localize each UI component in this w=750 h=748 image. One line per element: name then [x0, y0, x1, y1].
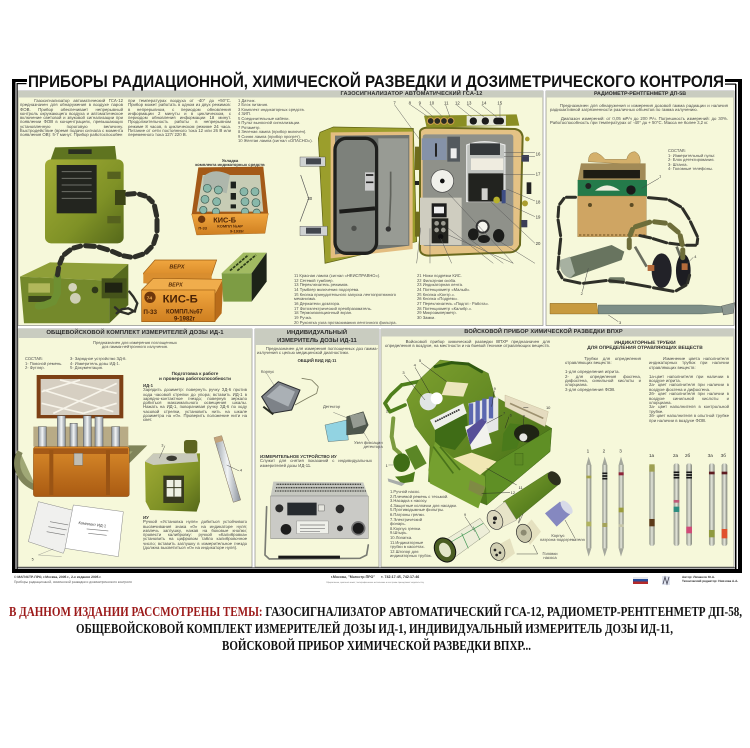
icon: ID-1 documentation booklets: 5	[32, 558, 34, 562]
text: GSA-12 parts list 21-30: 27 Переключатель «Подгот.- Работа».	[417, 301, 489, 306]
caption: pump heads: насоса	[543, 555, 557, 560]
text: GSA-12 parts list 1-10: 9 Синяя лампа (прибор прогрет).	[238, 134, 301, 139]
text: GSA-12 parts list 21-30: 30 Замки.	[417, 315, 435, 320]
text: tube colour changes: 3а- цвет наполнителя в контрольной трубке.	[649, 404, 729, 414]
icon: VPKhR kit: 1	[386, 463, 389, 468]
icon: VPKhR flashlight and pump heads	[430, 469, 575, 566]
footer: publisher contact	[326, 575, 424, 584]
heading: indicator tubes: ИНДИКАТОРНЫЕ ТРУБКИ	[614, 341, 676, 346]
icon: ID-11 pouch	[262, 373, 318, 414]
icon: GSA-12 open case: 14	[482, 100, 487, 105]
text: tube colour changes: 2б- цвет наполнителя при наличии в воздухе синильной кислоты и хлорциана.	[649, 391, 729, 405]
text: VPKhR parts list: 8.Корпус грелки.	[390, 526, 421, 531]
text: GSA-12 parts list 11-20: 13 Переключатель режимов.	[294, 282, 349, 287]
icon: VPKhR kit: 10	[546, 405, 551, 410]
heading: ID-11: ИНДИВИДУАЛЬНЫЙ	[287, 330, 347, 336]
text: GSA-12 parts list 11-20: 20 Рукоятка узла протаскивания ленточного фильтра.	[294, 320, 397, 325]
indicator tubes group 1a 2a 2b 3a 3b: 3а	[708, 453, 713, 458]
caption: detector: Детектор	[323, 404, 340, 409]
caption: indicator kit layout	[195, 158, 265, 167]
indicator tubes group 1a 2a 2b 3a 3b: 2а	[673, 453, 679, 458]
text: ID-1 composition	[25, 356, 62, 370]
text: GSA-12 parts list 11-20: 16 Держатели дозатора.	[294, 301, 340, 306]
text: DP-5B composition: СОСТАВ:	[668, 148, 686, 153]
text: VPKhR parts list: 1.Ручной насос.	[390, 489, 420, 494]
text: GSA-12 parts list 1-10: 1 Датчик.	[238, 98, 256, 103]
text: DP-5B composition: 4- Головные телефоны.	[668, 166, 713, 171]
text: DP-5B composition: 2- Блок детектирования.	[668, 157, 715, 162]
text: tube colour changes: Изменение цвета наполнителя индикаторных трубок при наличии отравляющих веществ:	[649, 356, 729, 370]
icon: GSA-12 open case: 16	[536, 152, 541, 157]
icon: open KIS-B indicator kit	[192, 167, 268, 235]
icon: VPKhR kit: 9	[494, 386, 497, 391]
text: VPKhR parts list: 11.Индикаторные	[390, 540, 423, 545]
text: tube purposes: Трубки для определения отравляющих веществ:	[565, 356, 641, 365]
icon: KIS-B crates	[142, 260, 223, 323]
icon: VPKhR kit: 8	[523, 414, 526, 419]
text: VPKhR parts list: 2.Плечевой ремень с тесьмой.	[390, 494, 448, 499]
icon: publisher logo	[662, 576, 670, 585]
icon: KIS-B crates: КОМПЛ.№67	[166, 308, 203, 315]
caption: indicator kit layout: Укладка	[222, 158, 238, 163]
text: measuring device: Служит для снятия показаний с индивидуальных измерителей дозы ИД-11.	[260, 458, 372, 468]
icon: ID-1 charger and dosimeter tube	[145, 436, 242, 512]
icon: GSA-12 open case: 7	[393, 100, 396, 105]
icon: open KIS-B indicator kit: КИС-Б	[213, 216, 236, 225]
caption: cartridge housing	[540, 533, 585, 542]
text: GSA-12 parts list 21-30: 29 Микроамперметр.	[417, 310, 457, 315]
heading: VPKhR: ВОЙСКОВОЙ ПРИБОР ХИМИЧЕСКОЙ РАЗВЕДКИ ВПХР	[464, 329, 623, 335]
indicator tubes group 1a 2a 2b 3a 3b: 3б	[721, 453, 726, 458]
panel: dosimeter kit ID-1	[18, 329, 252, 567]
text: GSA-12 parts list 21-30: 24 Потенциометр «Малый».	[417, 287, 470, 292]
text: tube purposes: 2- для определения фосгена, дифосгена, синильной кислоты и хлорциана.	[565, 374, 641, 387]
text: GSA-12 parts list 1-10: 3 Комплект индикаторных средств.	[238, 107, 305, 112]
icon: ID-1 charger and dosimeter tube: 3	[161, 444, 163, 448]
footer: publisher contact: Оформление, оригинал-макет, полиграфическое исполнение и все права принадлежат издательству	[326, 582, 424, 584]
footer: publisher info: © МАГИСТР-ПРО, г.Москва, 2005 г., 2-е издание 2005 г.	[14, 575, 101, 579]
text: GSA-12 parts list 21-30: 26 Кнопка «Подрезк».	[417, 296, 458, 301]
footer: publisher info: Приборы радиационной, химической разведки и дозиметрического контроля	[14, 580, 132, 584]
text: VPKhR purpose: Войсковой прибор химической разведки ВПХР предназначен для определения в воздухе, на местности и на боевой технике отравляющих веществ.	[385, 339, 550, 348]
icon: open KIS-B indicator kit: КОМПЛ №АР	[217, 223, 243, 228]
footer: authors: Технический редактор: Ниязова А.А.	[682, 579, 738, 583]
text: IU preparation: ИУ	[143, 515, 149, 520]
icon: ZIP green box	[222, 253, 267, 302]
text: ID-1 composition continued	[70, 356, 127, 370]
text: VPKhR parts list: трубки в кассетах.	[390, 544, 425, 549]
text: GSA-12 parts list 11-20: 11 Красная лампа (сигнал «НЕИСПРАВНО»).	[294, 273, 380, 278]
text: VPKhR parts list: 3.Насадка к насосу.	[390, 498, 427, 503]
text: ID-1 preparation: ИД-1	[143, 383, 153, 388]
heading: indicator tubes	[587, 340, 703, 351]
text: DP-5B description	[550, 103, 728, 125]
text: VPKhR parts list: 7.Электрический	[390, 517, 422, 522]
text: ID-1 composition continued: 5- Документация.	[70, 365, 103, 370]
footer: publisher contact: г.Москва, "Магистр-ПРО" т. 742-17-45, 742-17-46	[331, 575, 419, 579]
text: GSA-12 parts list 21-30: 21 Ножи подрезки КИС.	[417, 273, 462, 278]
text: GSA-12 parts list 11-20: 19 Ручка.	[294, 315, 312, 320]
text: DP-5B composition: 1- Измерительный пульт.	[668, 152, 715, 158]
text: DP-5B composition	[668, 148, 715, 171]
text: GSA-12 parts list 1-10	[238, 98, 313, 143]
icon: GSA-12 open case: 17	[536, 172, 541, 177]
footer: publisher info	[14, 575, 132, 584]
icon: DP-5B radiometer with probe and headphones: 2	[581, 291, 584, 296]
indicator tubes group 1 2 3: 3	[619, 448, 622, 453]
icon: ID-11 detector	[325, 412, 369, 442]
icon: KIS-B crates: КИС-Б	[163, 294, 198, 306]
text: ID-1 preparation: Зарядить дозиметр: повернуть ручку ЗД-6 против хода часовой стрелки до упора; вставить ИД-1 в зарядно-контактное гнездо; повернув зеркало добиться максимального освещения шкалы. Нажать на ИД-1, поворачивая ручку ЗД-6 по ходу часовой стрелки, установить нить на шкале дозиметра на «0». Проверить положение нити на свет.	[143, 387, 247, 422]
text: ID-1 composition: 1- Поясной ремень.	[25, 360, 62, 366]
icon: GSA-12 open case: 15	[497, 100, 503, 105]
icon: GSA-12 open case: 11	[444, 100, 449, 105]
icon: DP-5B radiometer with probe and headphones	[550, 152, 735, 325]
text: GSA-12 parts list 11-20: 18 Термоизоляционный экран.	[294, 310, 352, 315]
text: GSA-12 parts list 11-20: 15 Кнопка принудительного запуска лентопротяжного	[294, 292, 396, 297]
text: VPKhR parts list: 9.Штырь.	[390, 530, 408, 535]
indicator tubes group 1a 2a 2b 3a 3b: 2б	[685, 453, 691, 458]
icon: VPKhR kit: 6	[510, 413, 513, 418]
icon: VPKhR kit: 4	[414, 363, 417, 368]
icon: KIS-B crates: П-33	[143, 309, 157, 316]
caption: cartridge housing: Корпус	[551, 533, 565, 538]
indicator tubes group 1 2 3: 1	[587, 448, 590, 453]
icon: GSA-12 open case: 8	[409, 100, 412, 105]
heading: preparation	[159, 371, 231, 381]
footer: authors: Автор: Лиманов Ю.А.	[682, 575, 715, 579]
text: GSA-12 description column 1: Газосигнализатор автоматический ГСА-12 предназначен для обнаружения в воздухе паров ФОВ. Прибор обеспечивает непрерывный контроль окружающего воздуха и автоматическое включение световой и звуковой сигнализации при появлении ФОВ в концентрациях, превышающих установленную пороговую величину. Быстродействие (время подачи сигнала с момента появления ОВ): 5-7 минут. Прибор работоспособен	[20, 98, 123, 137]
text: GSA-12 parts list 1-10: 5 Соединительные кабели.	[238, 116, 290, 121]
icon: KIS-B crates: 9-1982г	[174, 317, 196, 323]
caption: ID-11 overview: ОБЩИЙ ВИД ИД-11	[298, 358, 336, 363]
text: IU preparation: Ручкой «Установка нуля» добиться устойчивого высвечивания знака «0» на индикаторе нуля; извлечь заглушку, нажав на боковые кнопки; провести калибровку: ручкой «Калибровка» установить на цифровом табло калибровочное число; вставить заглушку в измерительное гнездо (должна высветиться «0» на индикаторе нуля).	[143, 519, 247, 550]
caption: cartridge housing: патрона-подогревателя	[540, 537, 585, 542]
icon: russian flag	[633, 577, 648, 584]
icon: ID-1 case with dosimeters	[17, 375, 140, 497]
icon: open KIS-B indicator kit: 9-1939г	[230, 229, 244, 234]
caption: indicator kit layout: комплекта индикаторных средств	[195, 162, 265, 167]
text: VPKhR parts list: 6.Патроны грелки.	[390, 512, 425, 517]
caption: detector fixing unit: детектора	[363, 444, 383, 449]
text: ID-11 purpose: Предназначен для измерения поглощенных доз гамма-излучения с целью медицинской диагностики.	[257, 346, 378, 355]
icon: VPKhR kit: 7	[503, 410, 506, 415]
heading: DP-5B: РАДИОМЕТР-РЕНТГЕНМЕТР ДП-5В	[594, 91, 686, 97]
icon: VPKhR kit: 12	[511, 490, 516, 495]
text: GSA-12 parts list 1-10: 7 Ротаметр.	[238, 125, 261, 130]
icon: KIS-B crates: 74	[147, 295, 152, 301]
text: VPKhR parts list: 4.Защитные колпачки для насадки.	[390, 503, 457, 508]
icon: VPKhR kit: 3	[402, 370, 405, 375]
bottom note text: ВОЙСКОВОЙ ПРИБОР ХИМИЧЕСКОЙ РАЗВЕДКИ ВПХР...	[222, 637, 531, 654]
text: GSA-12 parts list 1-10: 2 Блок питания.	[238, 102, 268, 107]
bottom note text	[9, 603, 742, 654]
text: GSA-12 parts list 11-20: механизма.	[294, 296, 316, 301]
text: DP-5B description: Диапазон измерений: от 0,05 мР/ч до 200 Р/ч. Погрешность измерений: до 30%. Работоспособность при температурах от -40° до + 50°С. Масса не более 3,2 кг.	[550, 116, 728, 125]
icon: DP-5B radiometer with probe and headphones: 4	[694, 254, 697, 259]
text: VPKhR parts list	[390, 489, 457, 558]
icon: VPKhR flashlight and pump heads: 9	[464, 513, 466, 517]
icon: open KIS-B indicator kit: П-33	[198, 225, 208, 230]
icon: GSA-12 open case: 19	[536, 214, 541, 219]
indicator tubes group 1 2 3	[586, 448, 624, 557]
panel: gas detector GSA-12	[18, 91, 543, 326]
text: GSA-12 parts list 21-30: 22 Фильтрная скоба.	[417, 278, 456, 283]
icon: DP-5B radiometer with probe and headphones: 1	[659, 174, 662, 179]
icon: GSA-12 sensor unit	[45, 146, 126, 243]
text: ID-1 purpose: доз гамма-нейтронного излучения.	[102, 344, 168, 349]
text: GSA-12 parts list 1-10: 10 Желтая лампа (сигнал «ОПАСНО»).	[238, 138, 313, 143]
text: ID-1 composition: 2- Футляр.	[25, 365, 45, 370]
icon: VPKhR kit	[385, 358, 552, 523]
text: measuring device: ИЗМЕРИТЕЛЬНОЕ УСТРОЙСТВО ИУ	[260, 454, 337, 459]
text: GSA-12 parts list 21-30: 23 Индикаторная лента.	[417, 282, 463, 287]
text: DP-5B description: Предназначен для обнаружения и измерения дозовой гамма радиации и наличия радиоактивной загрязненности различных объектов по гамма излучению.	[550, 103, 728, 112]
text: DP-5B composition: 3- Штанга.	[668, 162, 688, 166]
icon: GSA-12 open case: 18	[536, 199, 541, 204]
text: ID-1 purpose: Предназначен для измерения поглощенных	[93, 340, 177, 345]
icon: GSA-12 open case: 12	[455, 100, 460, 105]
icon: VPKhR kit: 5	[419, 358, 422, 363]
caption: pouch: Корпус	[261, 369, 274, 374]
panel: individual dosimeter ID-11	[255, 329, 379, 567]
icon: GSA-12 open case: 9	[419, 100, 422, 105]
text: GSA-12 parts list 11-20: 12 Сетевой тумблер.	[294, 278, 334, 283]
icon: KIS-B crates: ВЕРХ	[168, 283, 183, 289]
text: tube purposes	[565, 356, 641, 392]
caption: detector fixing unit: Узел фиксации	[354, 440, 383, 445]
text: VPKhR parts list: 10.Лопатка.	[390, 535, 412, 540]
heading: preparation: и проверка работоспособности	[159, 376, 231, 381]
icon: VPKhR kit: 11	[519, 485, 524, 490]
icon: GSA-12 open case	[300, 100, 541, 263]
icon: ID-1 documentation booklets	[28, 502, 123, 562]
text: ID-1 composition: СОСТАВ:	[25, 356, 43, 361]
text: GSA-12 parts list 21-30: 25 Кнопка «Контр.».	[417, 292, 455, 297]
text: ID-1 purpose	[93, 340, 177, 349]
text: VPKhR parts list: фонарь.	[390, 521, 406, 526]
text: tube colour changes: 2а- цвет наполнителя при наличии в воздухе фосгена и дифосгена.	[649, 382, 729, 392]
text: GSA-12 parts list 1-10: 6 Пульт выносной сигнализации.	[238, 120, 300, 125]
icon: GSA-12 open case: 20	[536, 241, 541, 246]
indicator tubes group 1a 2a 2b 3a 3b: 1а	[649, 453, 655, 458]
caption: pump heads: Головки	[542, 551, 558, 556]
indicator tubes group 1a 2a 2b 3a 3b	[649, 453, 727, 546]
caption: detector fixing unit	[354, 440, 383, 449]
icon: GSA-12 open case: 30	[307, 196, 313, 201]
text: VPKhR parts list: 12.Штопор для	[390, 549, 418, 554]
text: GSA-12 parts list 21-30	[417, 273, 489, 320]
text: measuring device	[260, 454, 372, 468]
text: tube colour changes	[649, 356, 729, 423]
text: VPKhR parts list: 5.Противодымные фильтры.	[390, 507, 444, 512]
text: tube colour changes: 3б- цвет наполнителя в опытной трубке при наличии в воздухе ФОВ.	[649, 413, 729, 423]
text: GSA-12 parts list 11-20: 14 Тумблер включения подогрева.	[294, 287, 359, 292]
heading: ID-11: ИЗМЕРИТЕЛЬ ДОЗЫ ИД-11	[277, 338, 357, 344]
panel: chemical reconnaissance device VPKhR	[381, 329, 734, 567]
text: GSA-12 parts list 21-30: 28 Потенциометр «Калибр.».	[417, 306, 472, 311]
text: GSA-12 parts list 1-10: 8 Зеленая лампа (прибор включен).	[238, 129, 306, 134]
caption: pump heads	[542, 551, 558, 560]
text: GSA-12 description column 2: при температурах воздуха от -40° до +50°С. Прибор может работать в одном из двух режимов: в непрерывном, с периодом обновления информации 2 минуты и в циклическом, с периодом обновления информации 18 минут. Продолжительность работы в непрерывном режиме 8 часов, в циклическом режиме 24 часа. Питание от сети постоянного тока 12 или 26 В или переменного тока 127/ 220 В.	[128, 98, 231, 137]
text: ID-1 composition continued: 4- Измеритель дозы ИД-1.	[70, 360, 120, 366]
text: tube colour changes: 1а-цвет наполнителя при наличии в воздухе иприта.	[649, 374, 729, 383]
footer: authors	[682, 575, 738, 583]
heading: preparation: Подготовка к работе	[172, 371, 218, 376]
text: tube purposes: 1-для определения иприта.	[565, 369, 620, 374]
heading: ID-1: ОБЩЕВОЙСКОВОЙ КОМПЛЕКТ ИЗМЕРИТЕЛЕЙ ДОЗЫ ИД-1	[46, 330, 224, 336]
icon: KIS-B crates: ВЕРХ	[169, 264, 186, 270]
panel: radiometer DP-5B	[546, 91, 734, 326]
heading: ID-11	[277, 328, 357, 344]
text: GSA-12 parts list 11-20: 17 Фотоэлектрический преобразователь.	[294, 306, 372, 311]
indicator tubes group 1 2 3: 2	[603, 448, 606, 453]
icon: GSA-12 open case: 13	[467, 100, 472, 105]
icon: ID-11 measuring device	[265, 482, 368, 559]
text: ID-1 composition continued: 3- Зарядное устройство ЗД-6.	[70, 356, 127, 361]
icon: VPKhR kit: 2'	[386, 409, 389, 414]
icon: ID-1 documentation booklets: Комплект ИД-1	[78, 520, 107, 528]
heading: indicator tubes: ДЛЯ ОПРЕДЕЛЕНИЯ ОТРАВЛЯЮЩИХ ВЕЩЕСТВ	[587, 346, 703, 351]
icon: DP-5B radiometer with probe and headphones: 3	[619, 320, 622, 325]
text: tube purposes: 3-для определения ФОВ.	[565, 387, 615, 392]
heading: GSA-12: ГАЗОСИГНАЛИЗАТОР АВТОМАТИЧЕСКИЙ ГСА-12	[341, 91, 482, 97]
outer poster frame	[12, 79, 742, 573]
text: GSA-12 parts list 11-20	[294, 273, 397, 325]
icon: GSA-12 power unit box	[20, 262, 137, 323]
text: VPKhR parts list: индикаторных трубок.	[390, 553, 432, 558]
text: GSA-12 parts list 1-10: 4 ЗИП.	[238, 111, 251, 116]
icon: ID-1 charger and dosimeter tube: 4	[240, 469, 242, 473]
icon: GSA-12 open case: 10	[429, 100, 435, 105]
